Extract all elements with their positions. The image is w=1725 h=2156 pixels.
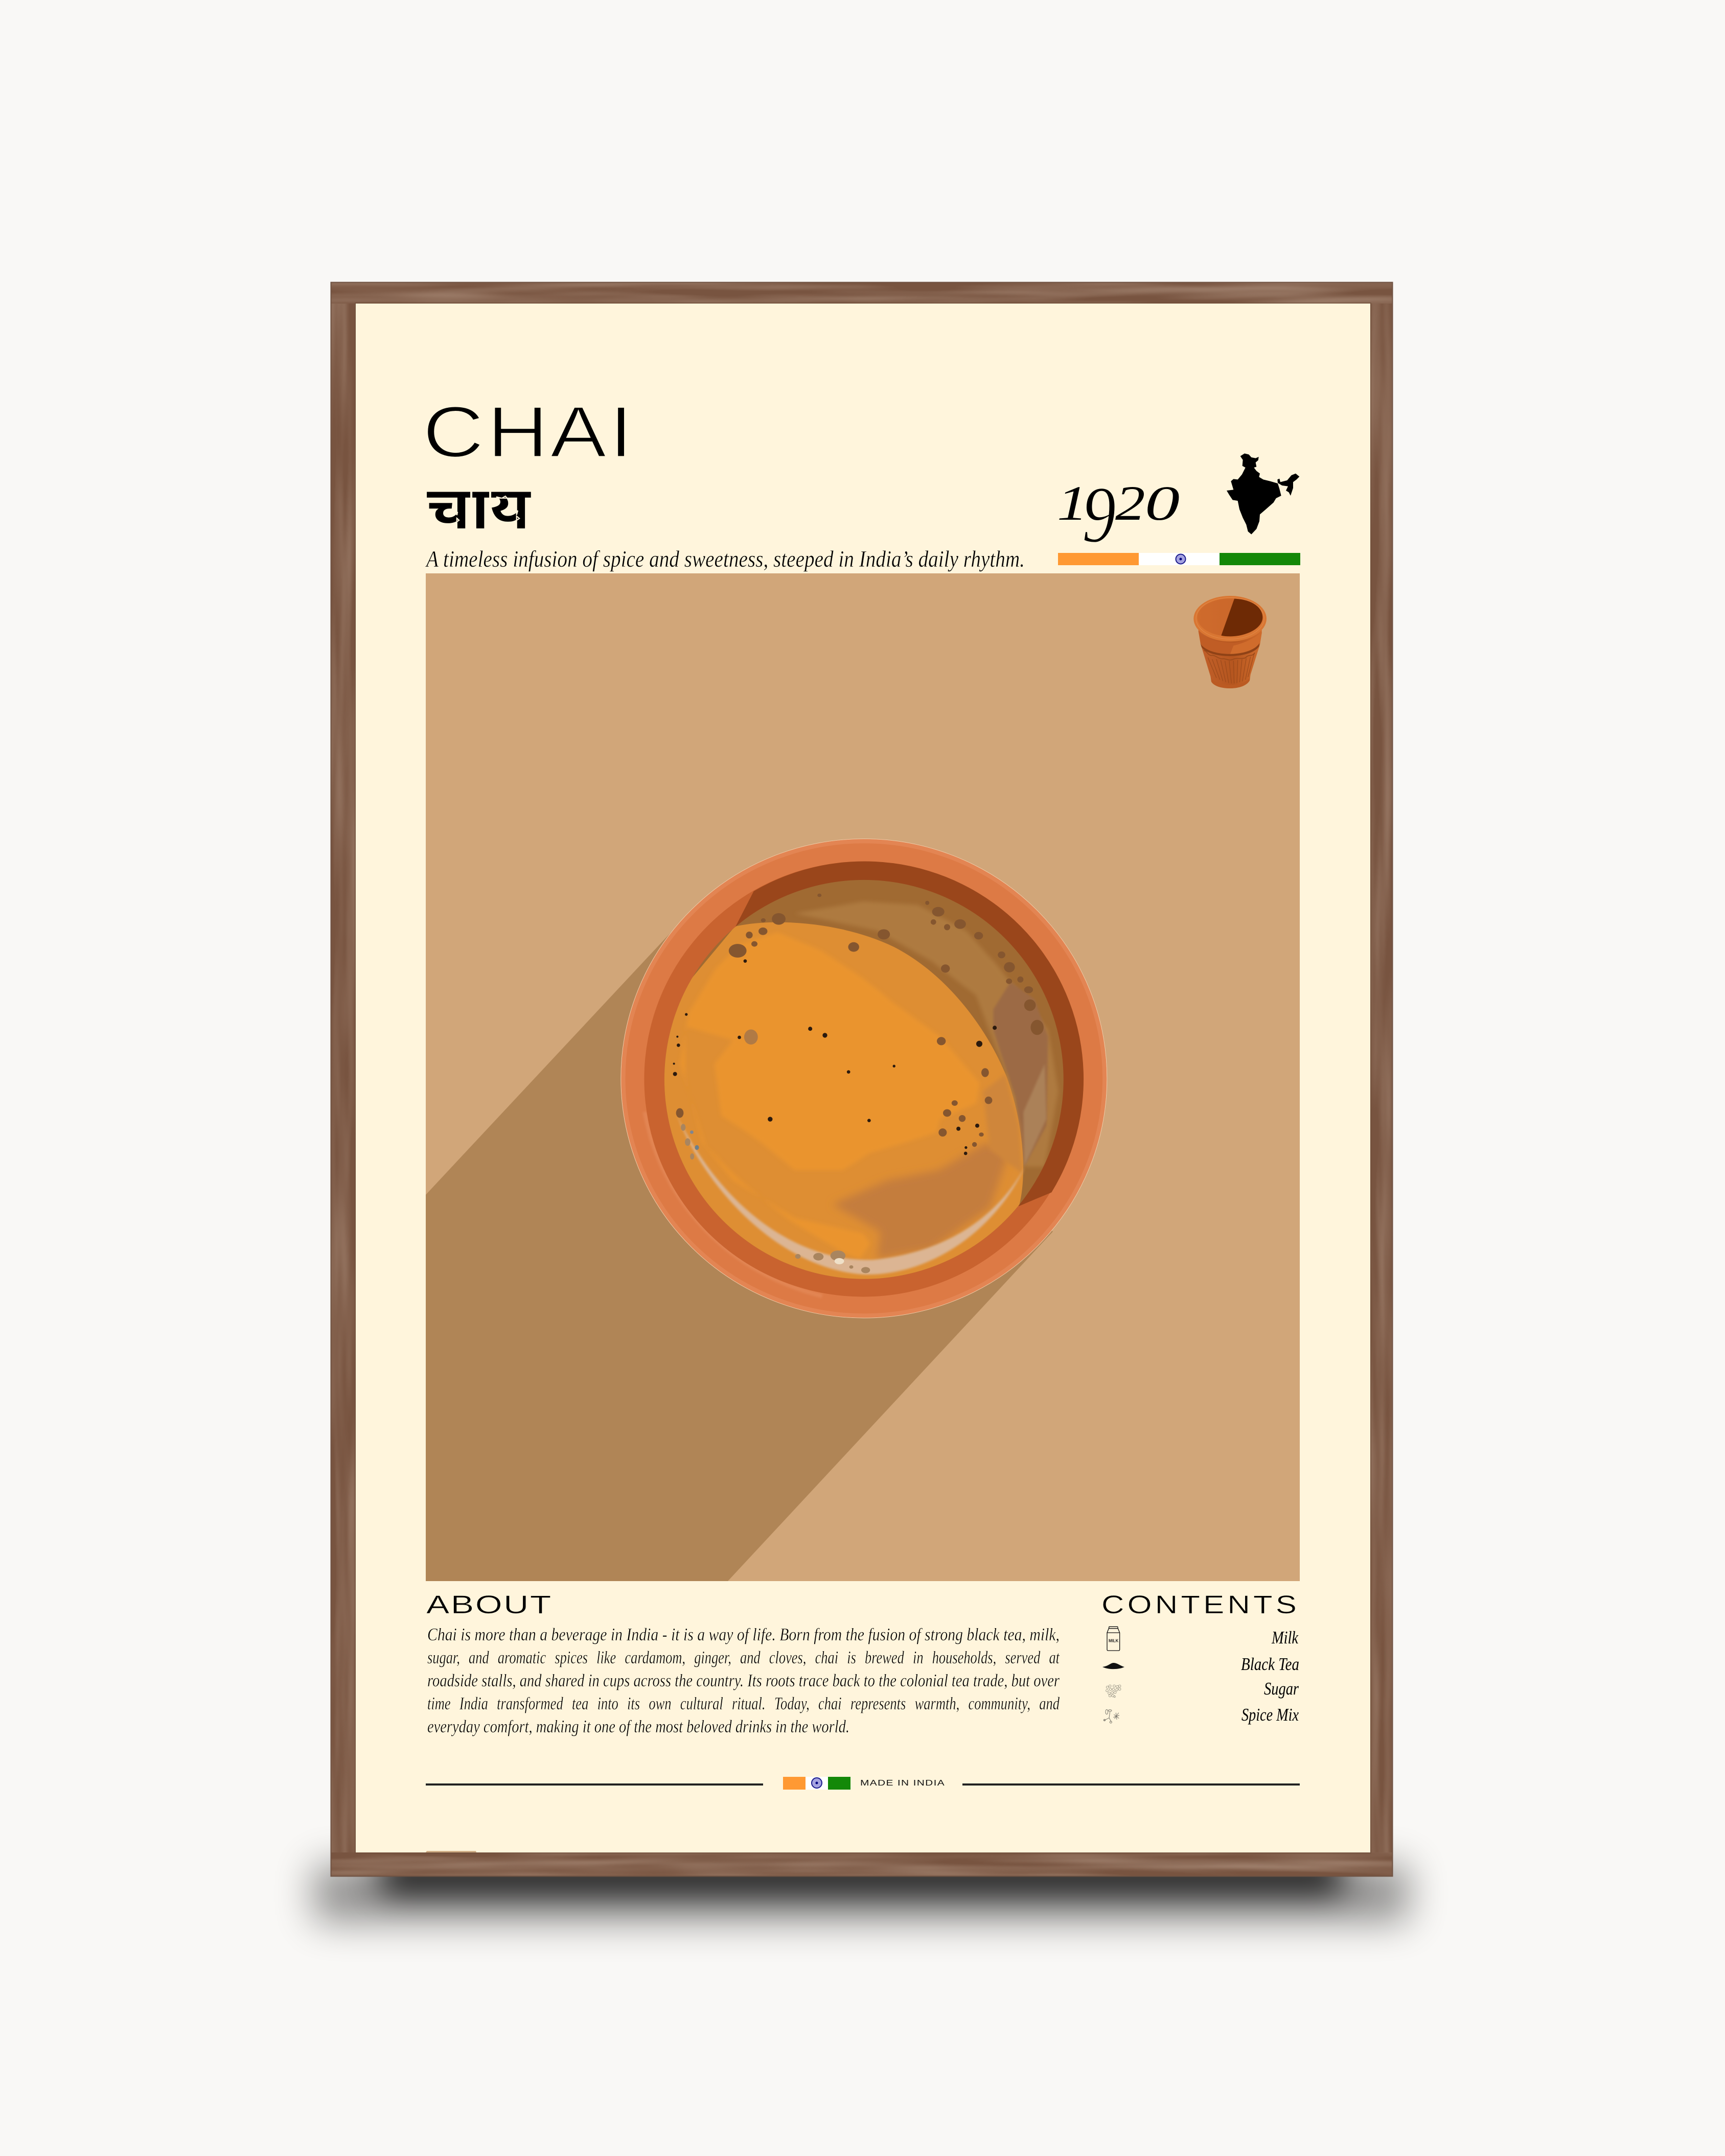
badge flag	[783, 1777, 850, 1790]
icon: milk carton: MILK	[1109, 1639, 1119, 1643]
illustration panel	[426, 573, 1300, 1581]
year 1920: 2	[1115, 477, 1145, 531]
icon: milk carton	[1107, 1627, 1120, 1651]
heading: CONTENTS: CONTENTS	[1101, 1590, 1300, 1619]
label: Spice Mix: Spice Mix	[1241, 1705, 1299, 1725]
paper sheet	[355, 303, 1371, 1853]
year 1920: 0	[1145, 476, 1180, 530]
year 1920: 1	[1057, 476, 1088, 530]
top-view clay cup of chai	[621, 839, 1107, 1318]
label: Black Tea: Black Tea	[1241, 1654, 1299, 1674]
flag bar	[1058, 553, 1300, 565]
about text block: sugar, and aromatic spices like cardamom, ginger, and cloves, chai is brewed in households, served at	[427, 1648, 1060, 1667]
small kulhad cup	[1193, 596, 1267, 688]
contents list	[1102, 1627, 1299, 1725]
tea surface	[637, 901, 1059, 1297]
meniscus highlight	[677, 1115, 1025, 1274]
icon: sugar crystals	[1106, 1685, 1121, 1698]
long cast shadow	[426, 923, 1053, 1581]
label: Milk: Milk	[1271, 1628, 1299, 1648]
footer rule and made in India badge	[426, 1777, 1300, 1790]
about text block: roadside stalls, and shared in cups across the country. Its roots trace back to the colonial tea trade, but over	[427, 1671, 1060, 1690]
icon: map of India	[1227, 453, 1299, 535]
wooden frame	[331, 282, 1393, 1876]
icon: black tea pile	[1102, 1663, 1124, 1669]
poster mockup	[290, 282, 1432, 1947]
about text block: Chai is more than a beverage in India - it is a way of life. Born from the fusion of strong black tea, milk,	[427, 1625, 1060, 1644]
heading: ABOUT: ABOUT	[426, 1590, 553, 1619]
year 1920	[1057, 470, 1180, 560]
label: Sugar: Sugar	[1264, 1679, 1299, 1699]
title: CHAI: CHAI	[423, 391, 633, 472]
year 1920: 9	[1082, 470, 1116, 560]
tagline: A timeless infusion of spice and sweetness, steeped in India’s daily rhythm.	[425, 546, 1025, 572]
about text block	[427, 1625, 1060, 1736]
icon: spice mix	[1103, 1709, 1119, 1723]
title: Hindi chai: चाय	[426, 475, 532, 554]
frame shadow	[314, 1860, 1408, 1921]
bubbles	[676, 894, 1044, 1147]
about text block: time India transformed tea into its own cultural ritual. Today, chai represents warmth, community, and	[427, 1694, 1060, 1713]
badge text: MADE IN INDIA	[860, 1779, 945, 1788]
about text block: everyday comfort, making it one of the most beloved drinks in the world.	[427, 1717, 849, 1736]
